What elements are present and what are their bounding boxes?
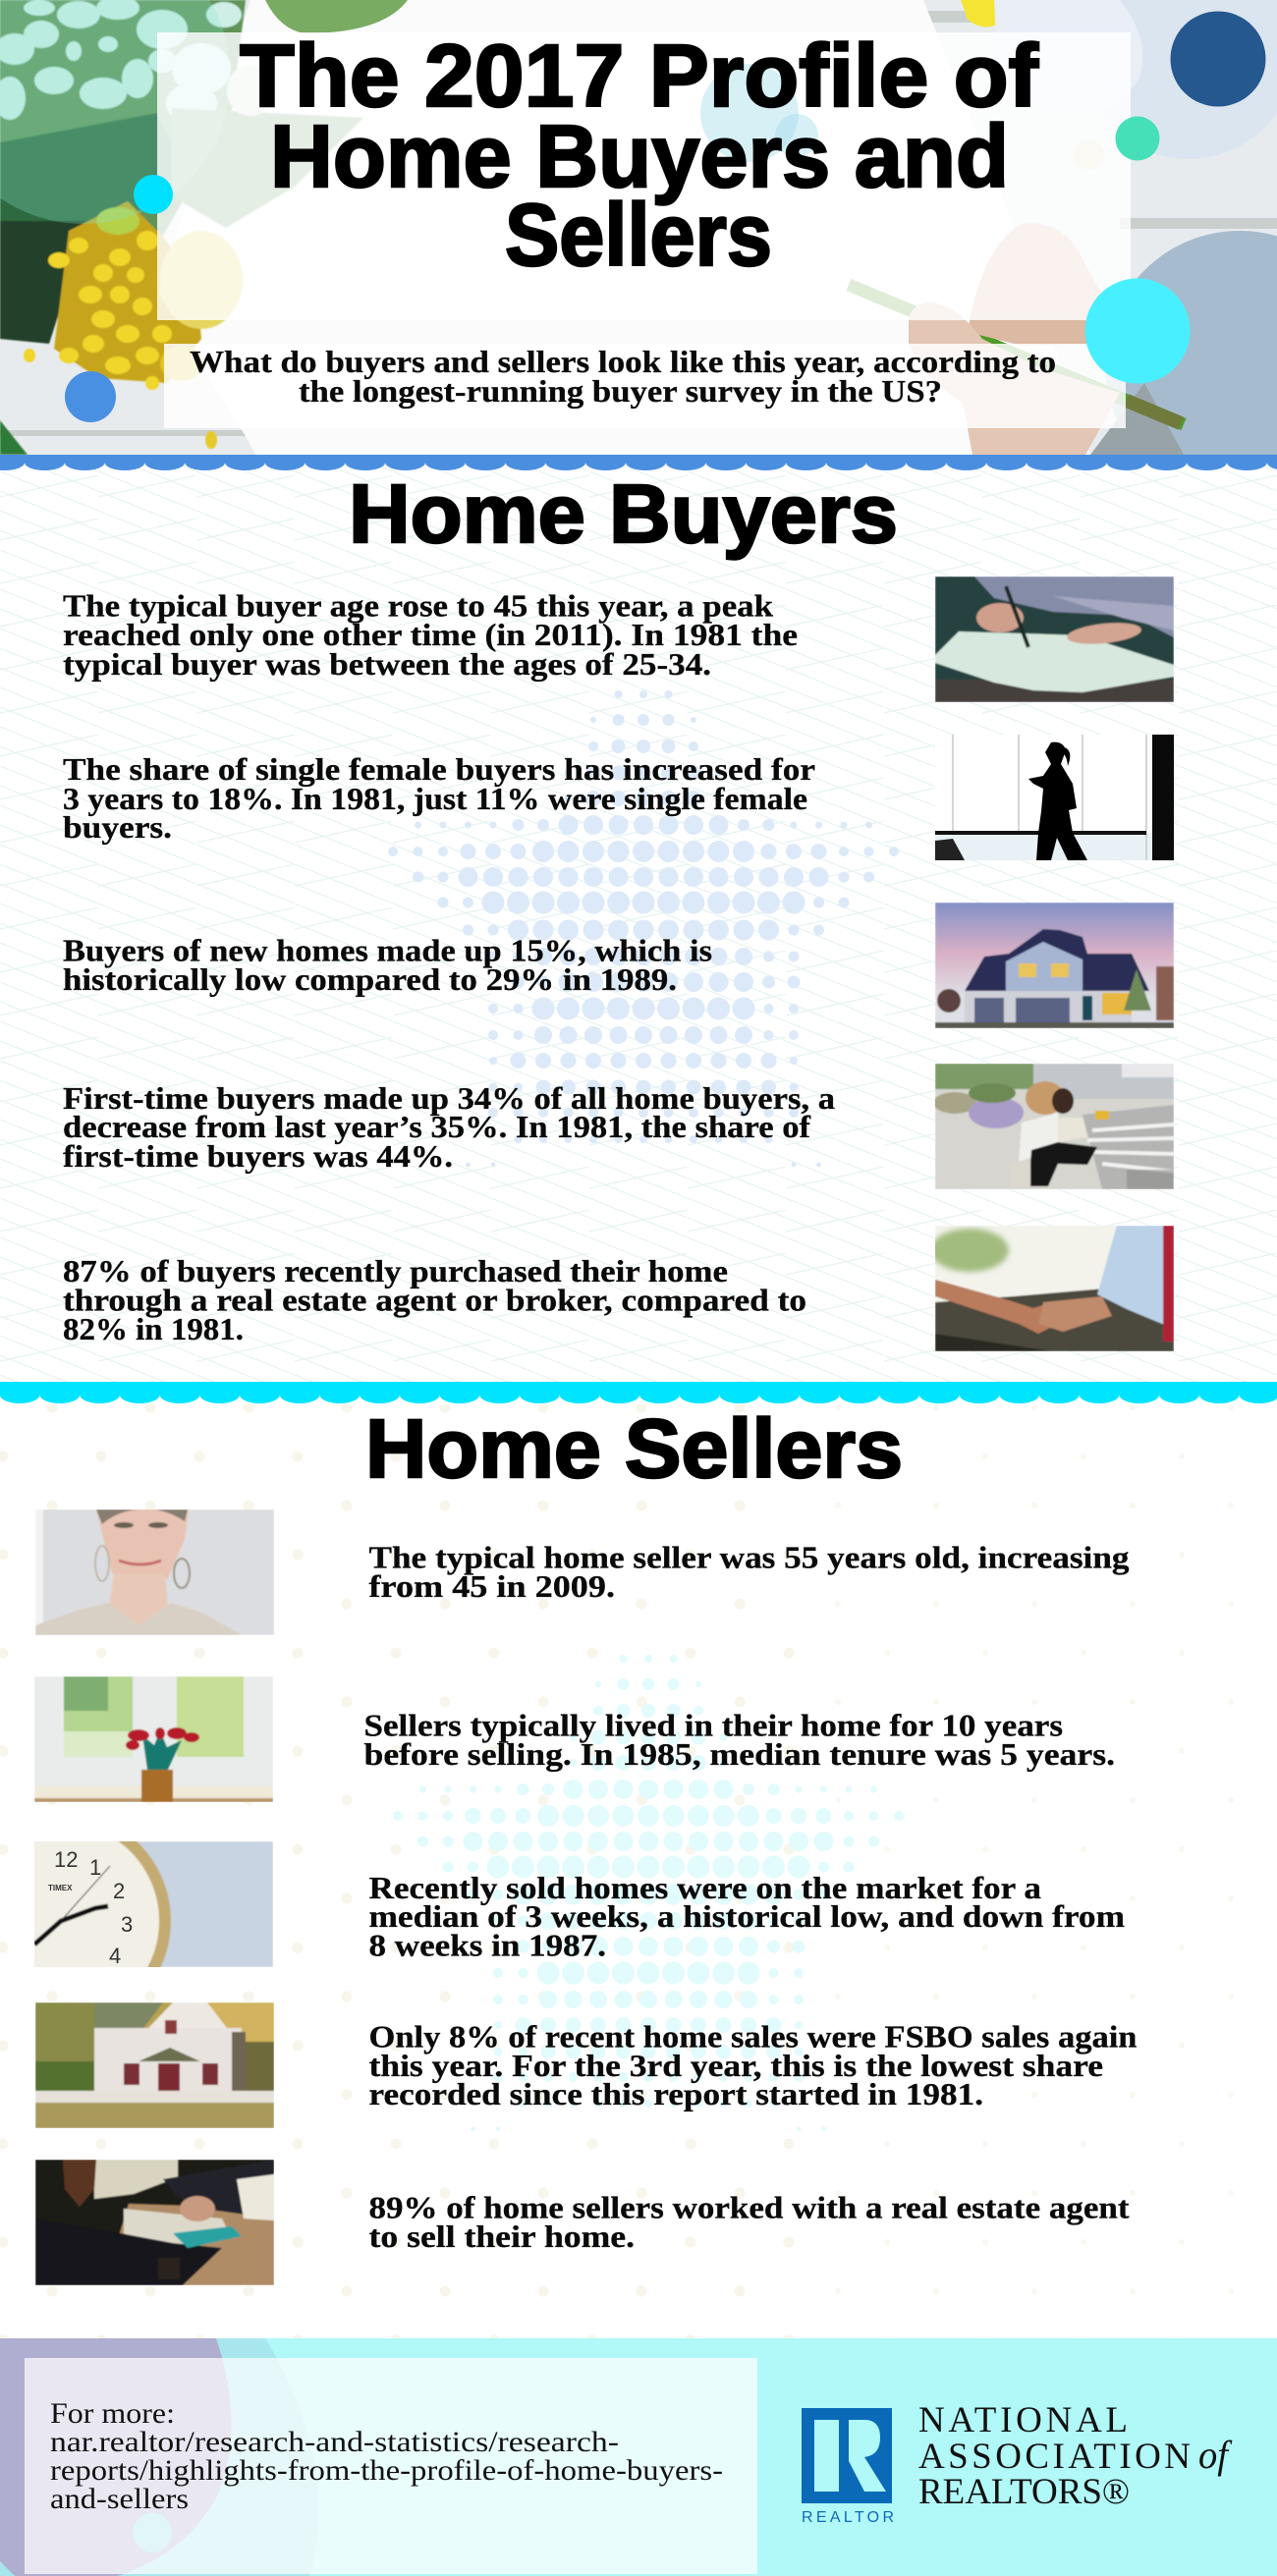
text: time on market: 8 weeks in 1987. xyxy=(369,1927,606,1962)
text: seller tenure: Sellers typically lived in their home for 10 years xyxy=(363,1707,1063,1742)
grey blue circle xyxy=(1105,231,1277,500)
text: for more link xyxy=(50,2397,723,2515)
text: agent buyers: 87% of buyers recently purchased their home xyxy=(63,1253,728,1288)
text: national association of realtors: REALTORS® xyxy=(918,2472,1130,2512)
title: Sellers xyxy=(505,187,772,285)
text: single female buyers: 3 years to 18%. In 1981, just 11% were single female xyxy=(63,781,807,816)
mint translucent circle xyxy=(0,0,231,224)
panel: title backing xyxy=(157,32,1131,320)
text: buyer age: typical buyer was between the ages of 25-34. xyxy=(63,646,711,682)
hand xyxy=(968,223,1130,346)
top right pale circle xyxy=(1081,0,1277,159)
text: new homes xyxy=(63,933,712,997)
text: seller age: from 45 in 2009. xyxy=(369,1568,615,1604)
green leaf at top xyxy=(265,0,408,33)
text: sellers with agents: 89% of home sellers worked with a real estate agent xyxy=(369,2190,1130,2225)
subtitle: What do buyers and sellers look like this year, according to xyxy=(190,344,1056,379)
photo: silhouette of walking woman xyxy=(935,735,1174,860)
text: time on market: Recently sold homes were on the market for a xyxy=(369,1870,1041,1905)
text: seller age: The typical home seller was 55 years old, increasing xyxy=(369,1540,1130,1575)
scalloped divider: blue xyxy=(0,455,1277,471)
title: Home Buyers and xyxy=(270,108,1009,206)
heading: home buyers: Home Buyers xyxy=(349,467,898,560)
text: national association of realtors: of xyxy=(1198,2433,1233,2477)
text: for more link: and-sellers xyxy=(50,2483,189,2515)
panel: subtitle backing xyxy=(164,344,1126,428)
scalloped divider: cyan xyxy=(0,1382,1277,1404)
daisy xyxy=(1073,140,1104,170)
panel: home sellers section background xyxy=(0,1404,1277,2338)
photo: clock face: 2 xyxy=(113,1879,125,1903)
text: for more link: For more: xyxy=(50,2397,175,2430)
photo: clock face xyxy=(34,1841,273,1968)
panel: home buyers section background xyxy=(0,462,1277,1385)
decor: header circles xyxy=(65,12,1265,422)
text: sellers with agents: to sell their home. xyxy=(369,2219,635,2254)
flowers xyxy=(0,0,363,455)
text: FSBO share: this year. For the 3rd year, this is the lowest share xyxy=(369,2048,1103,2083)
text: single female buyers xyxy=(63,751,815,845)
paper sheet xyxy=(157,0,1090,455)
icon: realtor logo: REALTOR xyxy=(802,2509,894,2526)
photo: clock face: TIMEX xyxy=(48,1884,73,1892)
text: FSBO share: recorded since this report started in 1981. xyxy=(369,2076,983,2111)
pencil xyxy=(1090,383,1184,455)
text: sellers with agents xyxy=(369,2190,1130,2254)
title xyxy=(240,27,1039,285)
text: seller age xyxy=(369,1540,1130,1604)
decor: pale circles behind title xyxy=(700,64,818,162)
photo: clock face: 12 xyxy=(54,1847,78,1872)
small footer circle xyxy=(133,2513,172,2552)
text: new homes: historically low compared to 29% in 1989. xyxy=(63,961,677,997)
title: The 2017 Profile of xyxy=(240,27,1039,126)
text: seller tenure: before selling. In 1985, median tenure was 5 years. xyxy=(363,1736,1115,1772)
white stone and yellow cap xyxy=(961,0,997,27)
photo: clock face: 3 xyxy=(121,1912,133,1937)
photo: mother and child on city street xyxy=(935,1064,1174,1189)
text: national association of realtors xyxy=(918,2400,1233,2512)
text: for more link: reports/highlights-from-the-profile-of-home-buyers- xyxy=(50,2454,723,2487)
photo: window with tulips xyxy=(34,1676,273,1802)
text: single female buyers: The share of single female buyers has increased for xyxy=(63,751,815,787)
text: seller tenure xyxy=(363,1707,1115,1772)
photo: signing a document xyxy=(935,576,1174,702)
plank seams xyxy=(0,11,1277,440)
photo: meeting at a table xyxy=(35,2160,274,2285)
text: buyer age: reached only one other time (in 2011). In 1981 the xyxy=(63,617,798,652)
footer link backing xyxy=(25,2358,757,2574)
text: single female buyers: buyers. xyxy=(63,809,172,845)
subtitle: the longest-running buyer survey in the US? xyxy=(299,373,942,409)
text: agent buyers: 82% in 1981. xyxy=(63,1311,244,1346)
photo: white cottage with autumn trees xyxy=(35,2002,274,2128)
text: for more link: nar.realtor/research-and-statistics/research- xyxy=(50,2426,619,2458)
text: time on market xyxy=(369,1870,1125,1962)
icon: realtor logo xyxy=(802,2408,894,2526)
heading: home sellers: Home Sellers xyxy=(365,1402,903,1495)
text: first-time buyers xyxy=(63,1080,835,1174)
photo: clock face: 1 xyxy=(89,1855,101,1880)
text: buyer age xyxy=(63,587,798,682)
photo: handshake xyxy=(935,1226,1174,1351)
text: national association of realtors: ASSOCIATION xyxy=(918,2437,1191,2477)
subtitle xyxy=(190,344,1056,409)
text: time on market: median of 3 weeks, a historical low, and down from xyxy=(369,1898,1125,1934)
text: FSBO share: Only 8% of recent home sales were FSBO sales again xyxy=(369,2019,1138,2055)
photo: clock face: 4 xyxy=(109,1944,121,1968)
panel: footer xyxy=(0,2338,1277,2576)
text: new homes: Buyers of new homes made up 15%, which is xyxy=(63,933,712,968)
panel: header background photo xyxy=(0,0,1277,500)
photo: older woman portrait xyxy=(35,1509,274,1635)
text: agent buyers xyxy=(63,1253,806,1346)
text: first-time buyers: First-time buyers made up 34% of all home buyers, a xyxy=(63,1080,835,1116)
text: first-time buyers: first-time buyers was 44%. xyxy=(63,1138,453,1174)
text: buyer age: The typical buyer age rose to 45 this year, a peak xyxy=(63,587,773,623)
text: agent buyers: through a real estate agent or broker, compared to xyxy=(63,1283,806,1318)
text: FSBO share xyxy=(369,2019,1138,2111)
text: first-time buyers: decrease from last year’s 35%. In 1981, the share of xyxy=(63,1109,810,1144)
text: national association of realtors: NATIONAL xyxy=(918,2400,1128,2440)
photo: blue house at dusk xyxy=(935,903,1174,1028)
